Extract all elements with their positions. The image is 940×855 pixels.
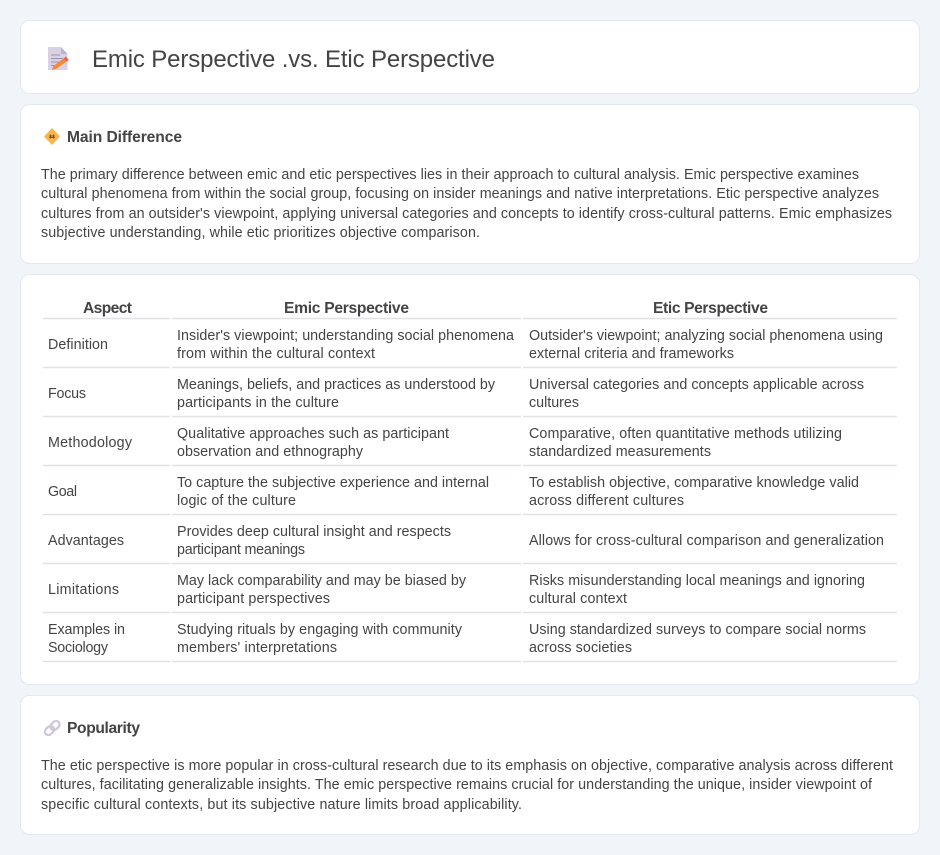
row: focus xyxy=(48,377,864,411)
row: goal xyxy=(48,475,859,509)
row: examples in sociology: Studying rituals by engaging with community xyxy=(177,622,463,638)
row: focus: participants in the culture xyxy=(177,395,339,411)
text block: main difference: cultural phenomena from within the social group, focusing on insider meanings and native interpretations. Etic perspective analyzes xyxy=(41,186,879,202)
row: examples in sociology: Sociology xyxy=(48,640,109,656)
row: focus: Meanings, beliefs, and practices as understood by xyxy=(177,377,496,393)
text block: popularity xyxy=(41,758,893,813)
row: methodology: observation and ethnography xyxy=(177,444,364,460)
title: Emic Perspective .vs. Etic Perspective xyxy=(92,46,495,73)
icon: warning diamond xyxy=(44,128,60,145)
row: definition: from within the cultural context xyxy=(177,346,375,362)
row: limitations: Limitations xyxy=(48,582,119,598)
row: examples in sociology xyxy=(48,622,866,656)
row: methodology: Methodology xyxy=(48,435,133,451)
row: advantages: Advantages xyxy=(48,533,124,549)
row: methodology xyxy=(48,426,842,460)
text block: popularity: The etic perspective is more popular in cross-cultural research due to its emphasis on objective, comparative analysis across different xyxy=(41,758,893,774)
row: focus: cultures xyxy=(529,395,579,411)
text block: main difference: subjective understanding, while etic prioritizes objective comparison. xyxy=(41,225,480,241)
row: definition xyxy=(48,328,883,362)
row: advantages: Provides deep cultural insight and respects xyxy=(177,524,451,540)
row: definition: Outsider's viewpoint; analyzing social phenomena using xyxy=(529,328,883,344)
row: examples in sociology: Examples in xyxy=(48,622,125,638)
text block: main difference xyxy=(41,167,892,241)
row: limitations: Risks misunderstanding local meanings and ignoring xyxy=(529,573,865,589)
table header: Aspect xyxy=(83,300,132,317)
text block: main difference: The primary difference between emic and etic perspectives lies in their approach to cultural analysis. Emic perspective examines xyxy=(41,167,859,183)
row: advantages: participant meanings xyxy=(177,542,305,558)
heading: popularity: Popularity xyxy=(67,720,140,737)
row: advantages: Allows for cross-cultural comparison and generalization xyxy=(529,533,884,549)
row: goal: logic of the culture xyxy=(177,493,296,509)
table header: Etic Perspective xyxy=(653,300,768,317)
row: goal: Goal xyxy=(48,484,77,500)
text block: main difference: cultures from an outsider's viewpoint, applying universal categories and concepts to identify cross-cultural patterns. Emic emphasizes xyxy=(41,206,892,222)
row: methodology: Qualitative approaches such as participant xyxy=(177,426,449,442)
row: advantages xyxy=(48,524,884,558)
table header xyxy=(83,300,768,317)
icon: document with pencil xyxy=(48,47,69,70)
row: goal: To establish objective, comparative knowledge valid xyxy=(529,475,859,491)
icon: chain link xyxy=(43,719,61,737)
row: limitations xyxy=(48,573,865,607)
row: limitations: cultural context xyxy=(529,591,627,607)
row: definition: external criteria and frameworks xyxy=(529,346,734,362)
row: focus: Universal categories and concepts applicable across xyxy=(529,377,864,393)
row: methodology: Comparative, often quantitative methods utilizing xyxy=(529,426,842,442)
panel: popularity xyxy=(20,696,920,834)
row: methodology: standardized measurements xyxy=(529,444,711,460)
row: definition: Insider's viewpoint; understanding social phenomena xyxy=(177,328,514,344)
row: examples in sociology: Using standardized surveys to compare social norms xyxy=(529,622,866,638)
table header: Emic Perspective xyxy=(284,300,409,317)
page header panel xyxy=(20,20,920,94)
text block: popularity: specific cultural contexts, but its subjective nature limits broad applicability. xyxy=(41,797,522,813)
row: goal: To capture the subjective experience and internal xyxy=(177,475,489,491)
row: limitations: May lack comparability and may be biased by xyxy=(177,573,467,589)
row: goal: across different cultures xyxy=(529,493,684,509)
panel: comparison table xyxy=(20,274,920,684)
heading: main difference: Main Difference xyxy=(67,129,182,146)
row: examples in sociology: across societies xyxy=(529,640,632,656)
row: examples in sociology: members' interpretations xyxy=(177,640,337,656)
row: definition: Definition xyxy=(48,337,108,353)
row: focus: Focus xyxy=(48,386,86,402)
panel: main difference xyxy=(20,104,920,264)
text block: popularity: cultures, facilitating generalizable insights. The emic perspective remains crucial for understanding the unique, insider viewpoint of xyxy=(41,777,872,793)
row: limitations: participant perspectives xyxy=(177,591,330,607)
